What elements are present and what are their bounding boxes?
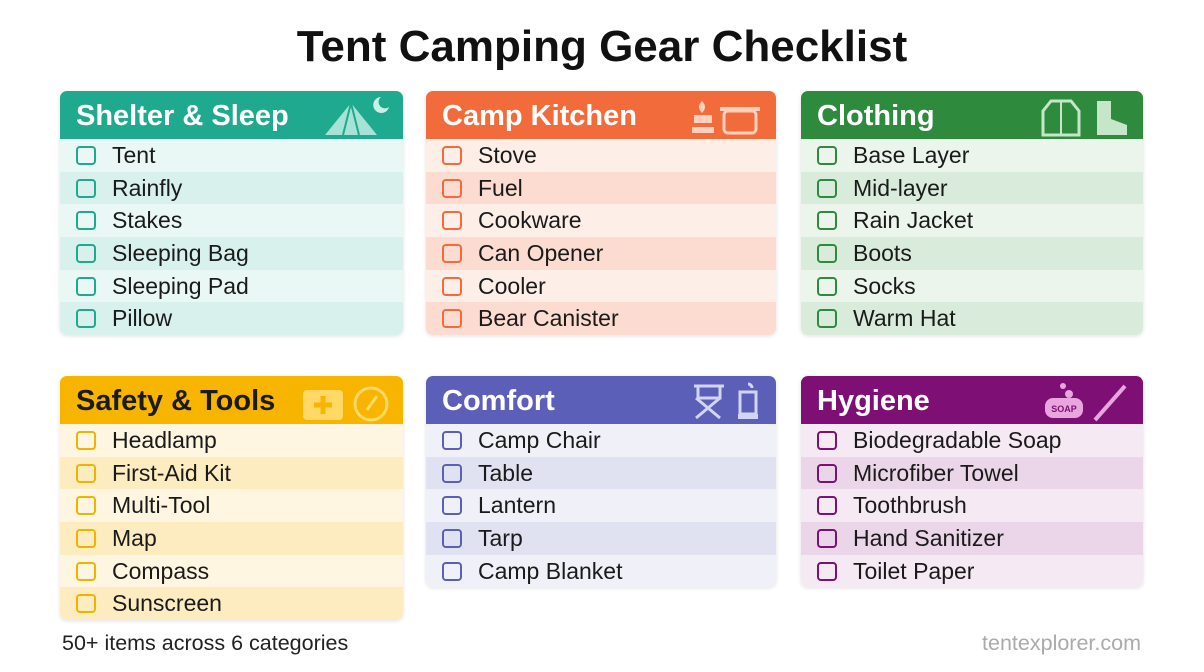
panel: camp kitchen: Stove (478, 142, 537, 168)
panel: clothing: Boots (853, 240, 912, 266)
panel: camp kitchen: Fuel (478, 175, 523, 201)
icon: tent (325, 97, 389, 135)
icon: stove and pot (692, 101, 760, 134)
panel: shelter & sleep: Tent (112, 142, 155, 168)
panel: comfort: Camp Chair (478, 427, 601, 453)
title: Tent Camping Gear Checklist (297, 22, 907, 71)
panel: safety & tools: Compass (112, 558, 209, 584)
panel: safety & tools (60, 376, 403, 620)
panel: camp kitchen: Cooler (478, 273, 546, 299)
panel: hygiene: Hand Sanitizer (853, 525, 1004, 551)
panel: clothing: Rain Jacket (853, 207, 973, 233)
panel: safety & tools: Sunscreen (112, 590, 222, 616)
panel: comfort (426, 376, 776, 587)
panel: comfort: Tarp (478, 525, 523, 551)
icon: soap and toothbrush: SOAP (1051, 404, 1077, 414)
panel: safety & tools: First-Aid Kit (112, 460, 231, 486)
heading: hygiene: Hygiene (817, 385, 930, 417)
heading: shelter & sleep: Shelter & Sleep (76, 100, 289, 132)
panel: camp kitchen: Can Opener (478, 240, 603, 266)
panel: shelter & sleep (60, 91, 403, 335)
icon: first aid and compass (303, 386, 388, 422)
heading: comfort: Comfort (442, 385, 555, 417)
heading: safety & tools: Safety & Tools (76, 385, 275, 417)
panel: hygiene (801, 376, 1143, 587)
panel: camp kitchen (426, 91, 776, 335)
panel: safety & tools: Map (112, 525, 157, 551)
panel: shelter & sleep: Sleeping Pad (112, 273, 249, 299)
heading: clothing: Clothing (817, 100, 935, 132)
panel: comfort: Lantern (478, 492, 556, 518)
panel: hygiene: Microfiber Towel (853, 460, 1019, 486)
panel: safety & tools: Multi-Tool (112, 492, 210, 518)
heading: safety & tools (60, 376, 403, 424)
panel: comfort: Camp Blanket (478, 558, 622, 584)
panel: camp kitchen: Cookware (478, 207, 582, 233)
heading: camp kitchen (426, 91, 776, 139)
heading: comfort (426, 376, 776, 424)
panel: clothing: Socks (853, 273, 916, 299)
heading: camp kitchen: Camp Kitchen (442, 100, 637, 132)
panel: hygiene: Biodegradable Soap (853, 427, 1061, 453)
panel: camp kitchen: Bear Canister (478, 305, 619, 331)
panel: shelter & sleep: Pillow (112, 305, 172, 331)
heading: shelter & sleep (60, 91, 403, 139)
panel: clothing: Warm Hat (853, 305, 956, 331)
footer: website: tentexplorer.com (982, 631, 1141, 655)
heading: clothing (801, 91, 1143, 139)
panel: clothing: Base Layer (853, 142, 969, 168)
panel: shelter & sleep: Rainfly (112, 175, 182, 201)
panel: clothing: Mid-layer (853, 175, 948, 201)
panel: hygiene: Toilet Paper (853, 558, 974, 584)
panel: hygiene: Toothbrush (853, 492, 967, 518)
icon: soap and toothbrush (1045, 383, 1126, 422)
icon: chair and lantern (694, 382, 758, 419)
panel: safety & tools: Headlamp (112, 427, 217, 453)
heading: hygiene (801, 376, 1143, 424)
footer: item count: 50+ items across 6 categories (62, 631, 348, 655)
panel: comfort: Table (478, 460, 533, 486)
panel: shelter & sleep: Stakes (112, 207, 182, 233)
panel: shelter & sleep: Sleeping Bag (112, 240, 249, 266)
icon: jacket and boot (1042, 100, 1127, 136)
panel: clothing (801, 91, 1143, 335)
